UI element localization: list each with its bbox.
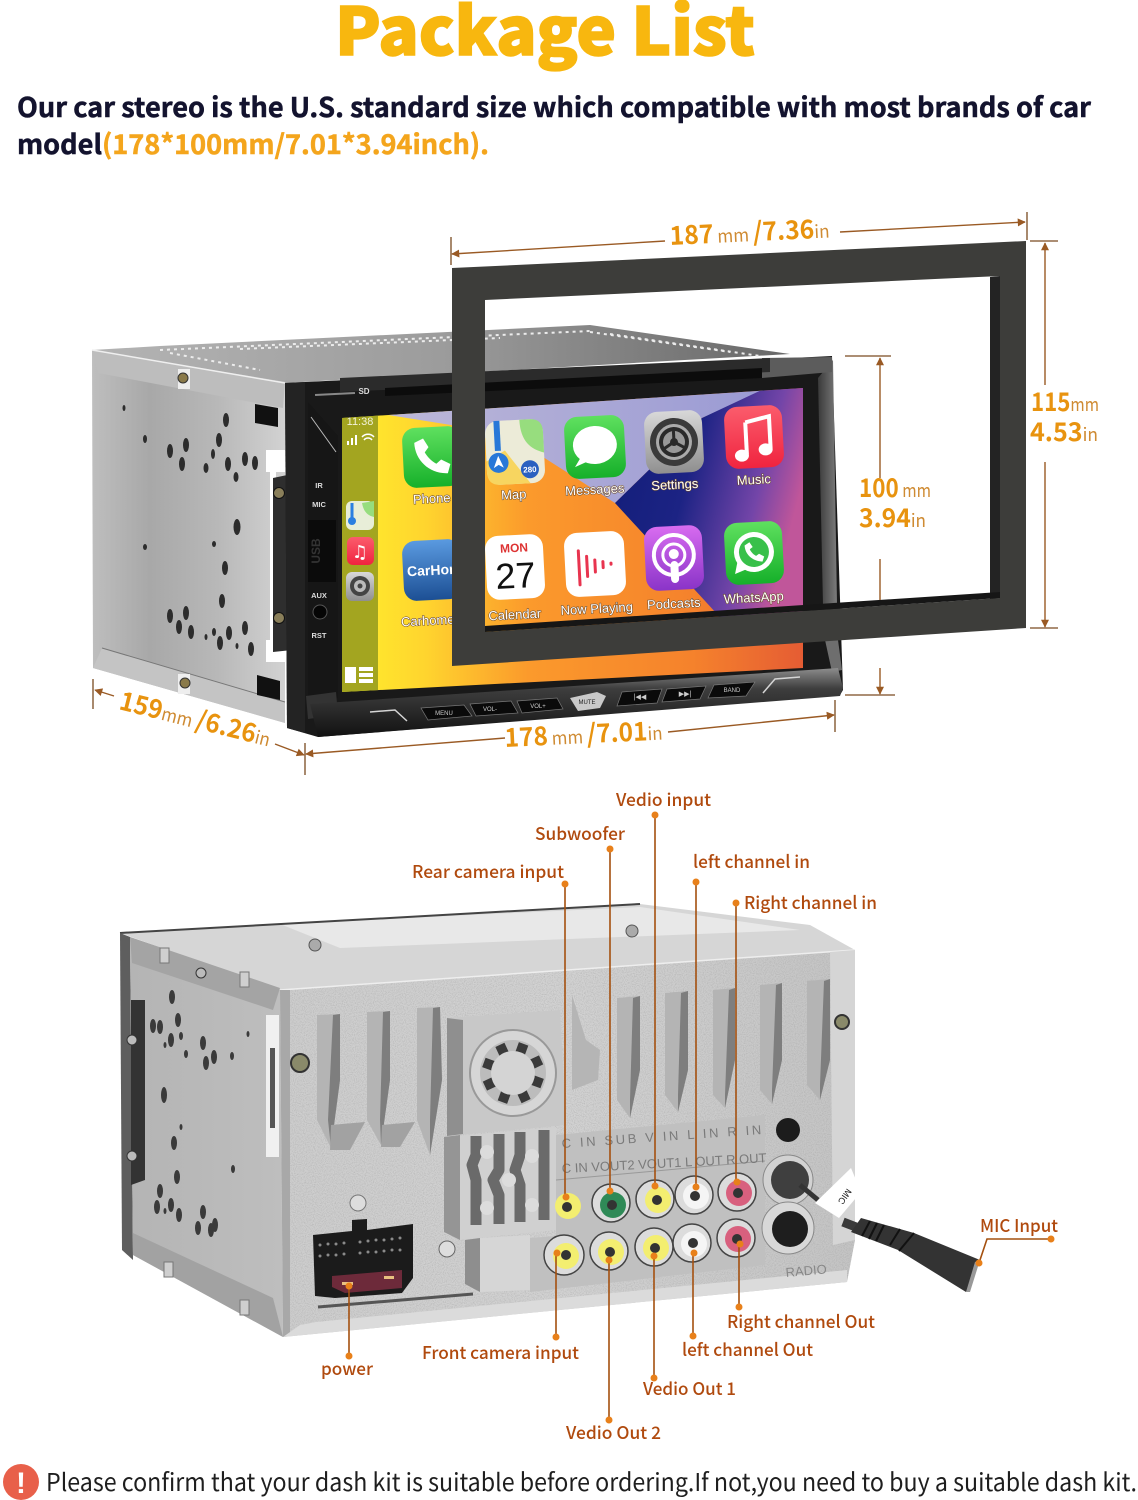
label: Front camera input: Front camera input	[422, 1340, 579, 1365]
app labels: Podcasts	[647, 595, 701, 612]
left side controls: IR	[315, 481, 323, 490]
app labels: Messages	[565, 480, 625, 499]
label: power	[321, 1282, 374, 1381]
icon: now playing	[563, 530, 627, 598]
sidebar status and icons	[345, 416, 374, 683]
radio knobs	[762, 1118, 818, 1254]
bottom button bar: MENU	[435, 711, 453, 717]
icon: settings	[643, 410, 705, 474]
dimension: 178 mm unit width	[306, 700, 835, 755]
bottom button bar: VOL+	[530, 704, 546, 710]
MIC plug	[843, 1218, 980, 1292]
icon: music	[723, 405, 785, 469]
label: power: power	[321, 1356, 374, 1381]
app labels	[401, 471, 784, 629]
label: Right channel in	[732, 890, 877, 1186]
dimension: 115 mm frame height: 115mm	[1031, 382, 1099, 419]
label: Front camera input	[422, 1250, 579, 1365]
label: MIC Input	[976, 1213, 1058, 1266]
app labels: Carhome	[401, 612, 455, 629]
icon: warning	[3, 1464, 39, 1500]
icon: calendar	[484, 534, 546, 600]
icon: map	[484, 419, 546, 485]
label: Subwoofer	[535, 821, 626, 1194]
fan module	[447, 995, 600, 1136]
label: Rear camera input	[412, 859, 570, 1200]
chassis top plate	[92, 325, 790, 383]
intro text: Our car stereo is the U.S. standard size which compatible with most brands of car	[17, 86, 1091, 125]
notice with warning icon	[3, 1464, 1137, 1500]
sidebar status and icons: ♫	[352, 542, 368, 563]
rear view of car stereo	[120, 904, 980, 1337]
MIC tag	[815, 1168, 861, 1218]
dimension: 100 mm screen height: 100 mm	[859, 468, 931, 505]
icon: calendar: 27	[494, 554, 537, 597]
bottom button bar: BAND	[724, 688, 741, 694]
heatsink vent	[444, 1127, 556, 1240]
label: Vedio Out 2: Vedio Out 2	[565, 1420, 661, 1445]
icon: phone	[401, 426, 463, 488]
app labels: Map	[501, 486, 527, 503]
label: Vedio Out 1: Vedio Out 1	[642, 1376, 736, 1401]
app labels: Phone	[413, 490, 451, 507]
label: Vedio input: Vedio input	[615, 787, 711, 812]
icon: calendar: MON	[500, 540, 528, 556]
dimension: 187 mm frame width	[451, 208, 1027, 265]
app labels: Now Playing	[560, 599, 633, 618]
label: Right channel Out: Right channel Out	[727, 1309, 875, 1334]
icon: carhome	[401, 538, 471, 601]
label: left channel Out	[682, 1250, 813, 1362]
dash kit frame	[452, 241, 1026, 666]
label: Right channel Out	[727, 1240, 875, 1334]
label: MIC Input: MIC Input	[980, 1213, 1058, 1238]
icon: whatsapp	[723, 521, 785, 585]
front view of car stereo	[92, 241, 1026, 737]
label: left channel Out: left channel Out	[682, 1337, 813, 1362]
bottom button bar: ▶▶|	[679, 691, 691, 698]
screws	[291, 1015, 849, 1257]
intro text	[17, 86, 1091, 162]
left side controls: USB	[309, 538, 323, 564]
bottom button bar: VOL-	[483, 707, 497, 713]
icon: podcasts	[643, 525, 705, 591]
dimension: 115 mm frame height	[1030, 241, 1099, 628]
left side controls	[306, 387, 370, 719]
dimension: 159 mm depth	[93, 679, 305, 775]
stereo face panel	[285, 356, 843, 737]
label: Right channel in: Right channel in	[744, 890, 877, 915]
wiring harness connector	[313, 1219, 413, 1298]
icon: carhome: CarHome	[407, 560, 470, 579]
rear side plate	[120, 933, 283, 1337]
left side controls: MIC	[312, 500, 326, 509]
left side controls: AUX	[311, 591, 327, 600]
intro text: (178*100mm/7.01*3.94inch).	[102, 123, 489, 162]
connector panel	[465, 1115, 827, 1292]
bottom button bar: MUTE	[578, 700, 596, 706]
dimension: 178 mm unit width: 178 mm /7.01in	[504, 711, 663, 755]
label: Rear camera input: Rear camera input	[412, 859, 564, 884]
dimension: 100 mm screen height	[845, 356, 931, 695]
connector panel: C IN SUB V IN L IN R IN	[561, 1122, 762, 1151]
bottom button bar	[310, 668, 843, 737]
label: left channel in	[692, 849, 810, 1190]
RCA sockets	[544, 1173, 756, 1275]
cooling slots	[317, 979, 830, 1155]
connector panel: C IN VOUT2 VOUT1 L OUT R OUT	[561, 1150, 767, 1176]
MIC tag: MIC	[836, 1187, 854, 1207]
callout labels	[321, 787, 1058, 1445]
intro text: model	[17, 123, 102, 162]
app labels: Music	[736, 471, 772, 488]
rear top plate	[120, 904, 855, 990]
dimension: 100 mm screen height: 3.94in	[859, 498, 926, 535]
icon: warning: !	[16, 1467, 26, 1500]
dimension: 115 mm frame height: 4.53in	[1030, 412, 1098, 449]
label: Vedio input	[615, 787, 711, 1190]
icon: map: 280	[523, 465, 537, 475]
sidebar status and icons: 11:38	[347, 416, 373, 428]
label: left channel in: left channel in	[693, 849, 810, 874]
rear back face	[280, 950, 855, 1337]
label: Subwoofer: Subwoofer	[535, 821, 626, 846]
label: Vedio Out 2	[565, 1256, 661, 1445]
app labels: Settings	[651, 476, 699, 493]
app labels: WhatsApp	[723, 588, 784, 607]
dimension: 159 mm depth: 159mm /6.26in	[116, 681, 275, 754]
left side controls: SD	[358, 387, 370, 396]
app labels: Calendar	[488, 606, 542, 623]
label: Vedio Out 1	[642, 1252, 736, 1401]
dimension: 187 mm frame width: 187 mm /7.36in	[669, 208, 830, 253]
touch screen with app icons	[340, 385, 810, 695]
connector panel: RADIO	[785, 1261, 827, 1280]
left side controls: RST	[312, 631, 327, 640]
icon: messages	[563, 414, 627, 480]
bottom button bar: |◀◀	[634, 694, 647, 701]
chassis side plate	[92, 350, 292, 723]
